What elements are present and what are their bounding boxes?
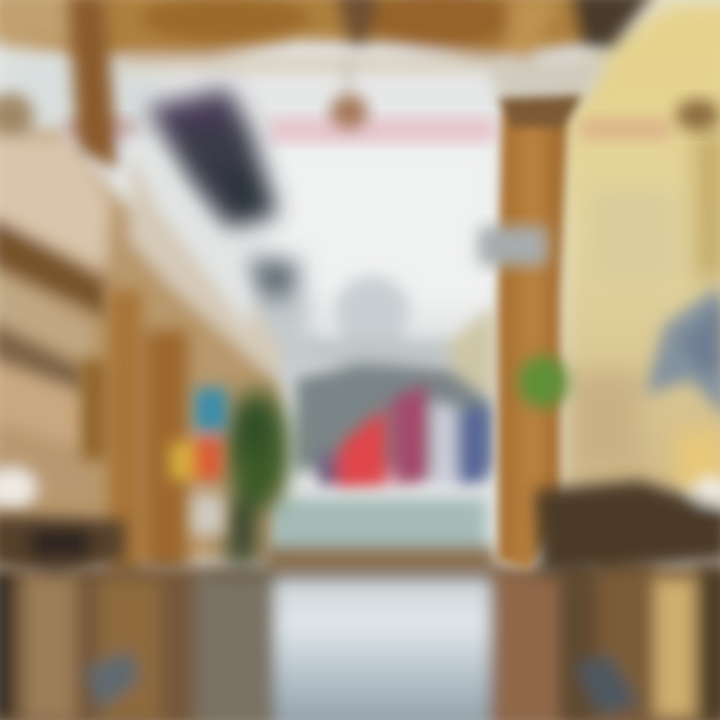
hanging lamp: centre xyxy=(330,60,368,129)
potted plant: left xyxy=(226,390,290,565)
column sign: grey plaque xyxy=(478,226,548,266)
hanging lamp: right xyxy=(676,99,720,131)
left counter: dark table edge xyxy=(0,515,125,575)
right table: dark counter and legs xyxy=(535,476,720,720)
main wooden column xyxy=(498,95,582,570)
pink banner stripe xyxy=(65,118,670,142)
flags: red, purple, blue xyxy=(318,385,488,488)
dark hanging banner xyxy=(148,88,300,298)
right wall: yellow panel xyxy=(560,0,720,500)
plant on column xyxy=(518,356,568,408)
left wall: shelves xyxy=(0,0,280,560)
colourful display: teal, yellow, red xyxy=(170,388,227,535)
distant landscape: dome and hills xyxy=(295,276,495,470)
left columns: wooden posts xyxy=(82,290,188,580)
ceiling: wooden beams xyxy=(0,0,660,102)
right blue-grey object xyxy=(645,285,720,420)
floor: polished reflection xyxy=(0,565,720,720)
water and sill xyxy=(265,498,495,572)
